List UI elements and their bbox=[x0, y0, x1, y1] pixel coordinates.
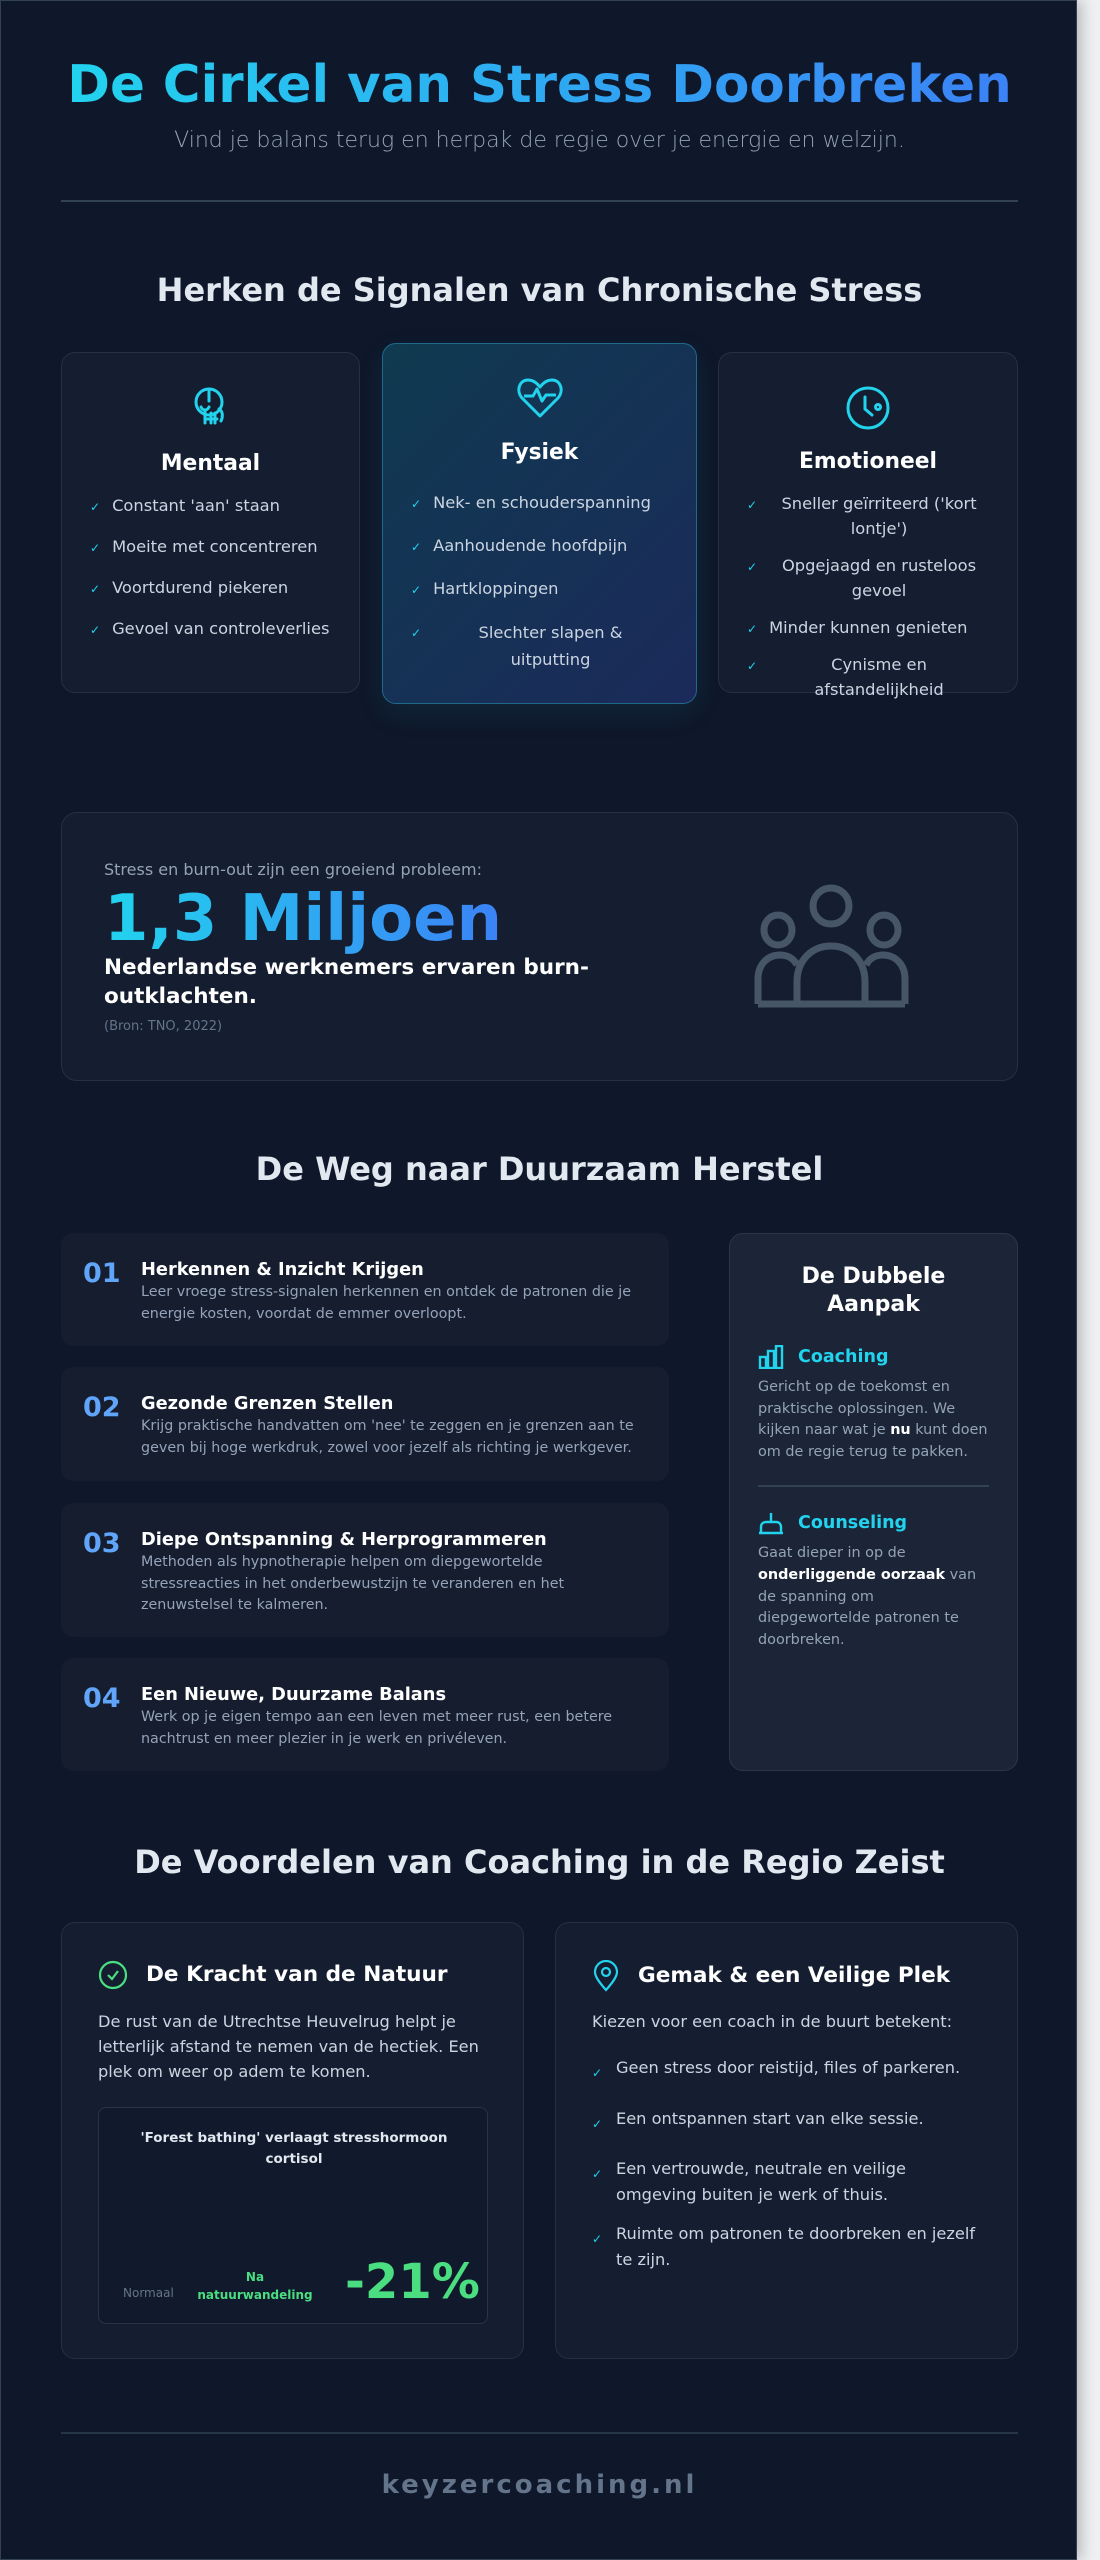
step 02 bbox=[61, 1367, 669, 1481]
step 03: Diepe Ontspanning & Herprogrammeren bbox=[141, 1529, 547, 1550]
icon: clock bbox=[846, 386, 890, 430]
panel: fysiek: ✓ bbox=[411, 497, 421, 511]
panel: emotioneel: Sneller geïrriteerd ('kort lontje') bbox=[781, 494, 977, 538]
panel: mentaal: ✓ bbox=[90, 582, 100, 596]
panel: fysiek: Hartkloppingen bbox=[433, 579, 558, 598]
heading: herstel: De Weg naar Duurzaam Herstel bbox=[256, 1150, 823, 1188]
step 02: 02 bbox=[83, 1392, 121, 1423]
panel: mentaal: Constant 'aan' staan bbox=[112, 496, 280, 515]
big number: 1,3 Miljoen bbox=[104, 882, 502, 956]
panel: natuur bbox=[61, 1922, 524, 2359]
heading: voordelen: De Voordelen van Coaching in de Regio Zeist bbox=[134, 1843, 945, 1881]
panel: fysiek: Fysiek bbox=[501, 440, 578, 465]
panel: fysiek: uitputting bbox=[511, 650, 590, 669]
gemak title: Gemak & een Veilige Plek bbox=[638, 1963, 950, 1988]
gemak list: Geen stress door reistijd, files of parkeren. bbox=[616, 2058, 960, 2077]
gemak list: ✓ bbox=[592, 2232, 602, 2246]
gemak list: Ruimte om patronen te doorbreken en jezelf te zijn. bbox=[616, 2224, 975, 2268]
source: (Bron: TNO, 2022) bbox=[104, 1019, 222, 1034]
panel: fysiek: Aanhoudende hoofdpijn bbox=[433, 536, 627, 555]
gemak list: Een ontspannen start van elke sessie. bbox=[616, 2108, 924, 2128]
panel: emotioneel: ✓ bbox=[747, 659, 757, 673]
step 04: Een Nieuwe, Duurzame Balans bbox=[141, 1684, 446, 1705]
gemak intro: Kiezen voor een coach in de buurt betekent: bbox=[592, 2012, 952, 2031]
icon: brain bbox=[194, 388, 224, 424]
chart: cortisol: -21% bbox=[345, 2254, 480, 2310]
counseling block: Gaat dieper in op de onderliggende oorzaak van de spanning om diepgewortelde patronen te doorbreken. bbox=[758, 1545, 976, 1648]
panel: emotioneel: ✓ bbox=[747, 560, 757, 574]
step 03: Methoden als hypnotherapie helpen om diepgewortelde stressreacties in het onderbewustzijn te veranderen en het zenuwstelsel te kalmeren. bbox=[141, 1554, 564, 1613]
panel: mentaal: Moeite met concentreren bbox=[112, 537, 318, 556]
panel: fysiek: ✓ bbox=[411, 626, 421, 640]
panel: mentaal bbox=[61, 352, 360, 693]
aanpak title bbox=[802, 1264, 945, 1317]
stat caption: Nederlandse werknemers ervaren burn-outklachten. bbox=[104, 955, 589, 1009]
gemak list: ✓ bbox=[592, 2066, 602, 2080]
gemak list: Een vertrouwde, neutrale en veilige omgeving buiten je werk of thuis. bbox=[616, 2159, 906, 2204]
icon: users bbox=[754, 884, 908, 1008]
chart: cortisol bbox=[98, 2107, 488, 2324]
chart: cortisol: Normaal bbox=[123, 2286, 174, 2300]
panel: mentaal: ✓ bbox=[90, 623, 100, 637]
gemak title bbox=[594, 1960, 950, 1992]
chart: cortisol: Na bbox=[246, 2270, 264, 2284]
panel: mentaal: ✓ bbox=[90, 541, 100, 555]
panel: mentaal: ✓ bbox=[90, 500, 100, 514]
step 01: Herkennen & Inzicht Krijgen bbox=[141, 1259, 424, 1280]
step 01: Leer vroege stress-signalen herkennen en ontdek de patronen die je energie kosten, voordat de emmer overloopt. bbox=[141, 1284, 631, 1322]
icon: heart pulse bbox=[517, 378, 563, 418]
aanpak title: Aanpak bbox=[827, 1292, 920, 1317]
panel: fysiek: ✓ bbox=[411, 583, 421, 597]
panel: fysiek bbox=[382, 343, 697, 704]
panel: statistiek bbox=[61, 812, 1018, 1081]
panel: fysiek: Nek- en schouderspanning bbox=[433, 493, 651, 512]
panel: emotioneel: Minder kunnen genieten bbox=[769, 618, 968, 637]
step 03 bbox=[61, 1503, 669, 1637]
step 02: Gezonde Grenzen Stellen bbox=[141, 1393, 393, 1414]
coaching block: Coaching bbox=[798, 1347, 888, 1367]
footer: keyzercoaching.nl bbox=[382, 2470, 697, 2500]
gemak list bbox=[592, 2058, 976, 2268]
step 04 bbox=[61, 1658, 669, 1771]
subtitle: Vind je balans terug en herpak de regie over je energie en welzijn. bbox=[174, 128, 905, 153]
counseling block: Counseling bbox=[798, 1513, 907, 1533]
title: De Cirkel van Stress Doorbreken bbox=[67, 55, 1012, 115]
natuur title: De Kracht van de Natuur bbox=[146, 1962, 448, 1987]
panel: emotioneel: Emotioneel bbox=[799, 449, 937, 474]
panel: mentaal: Gevoel van controleverlies bbox=[112, 619, 329, 638]
gemak list: ✓ bbox=[592, 2116, 602, 2130]
gemak list: ✓ bbox=[592, 2167, 602, 2181]
stat intro: Stress en burn-out zijn een groeiend probleem: bbox=[104, 860, 482, 879]
step 02: Krijg praktische handvatten om 'nee' te zeggen en je grenzen aan te geven bij hoge werkdruk, zowel voor jezelf als richting je werkgever. bbox=[141, 1418, 634, 1456]
panel: emotioneel bbox=[718, 352, 1018, 693]
panel: emotioneel: ✓ bbox=[747, 622, 757, 636]
panel: emotioneel: Cynisme en afstandelijkheid bbox=[814, 655, 944, 699]
panel: emotioneel: ✓ bbox=[747, 498, 757, 512]
panel: dubbele aanpak bbox=[729, 1233, 1018, 1771]
chart: cortisol: 'Forest bathing' verlaagt stresshormoon cortisol bbox=[140, 2130, 448, 2167]
panel: mentaal: Mentaal bbox=[161, 451, 260, 476]
panel: mentaal: Voortdurend piekeren bbox=[112, 578, 288, 597]
panel: emotioneel: Opgejaagd en rusteloos gevoel bbox=[782, 556, 976, 600]
aanpak title: De Dubbele bbox=[802, 1264, 945, 1289]
coaching block: Gericht op de toekomst en praktische oplossingen. We kijken naar wat je nu kunt doen om de regie terug te pakken. bbox=[758, 1379, 988, 1460]
chart: cortisol: natuurwandeling bbox=[197, 2288, 313, 2302]
panel: fysiek: ✓ bbox=[411, 540, 421, 554]
step 01 bbox=[61, 1233, 669, 1346]
step 04: 04 bbox=[83, 1683, 121, 1714]
natuur text: De rust van de Utrechtse Heuvelrug helpt je letterlijk afstand te nemen van de hectiek. Een plek om weer op adem te komen. bbox=[98, 2012, 479, 2081]
panel: gemak bbox=[555, 1922, 1018, 2359]
step 01: 01 bbox=[83, 1258, 121, 1289]
heading: signalen: Herken de Signalen van Chronische Stress bbox=[157, 271, 922, 309]
panel: fysiek: Slechter slapen & bbox=[479, 623, 622, 642]
step 03: 03 bbox=[83, 1528, 121, 1559]
step 04: Werk op je eigen tempo aan een leven met meer rust, een betere nachtrust en meer plezier in je werk en privéleven. bbox=[141, 1709, 612, 1746]
